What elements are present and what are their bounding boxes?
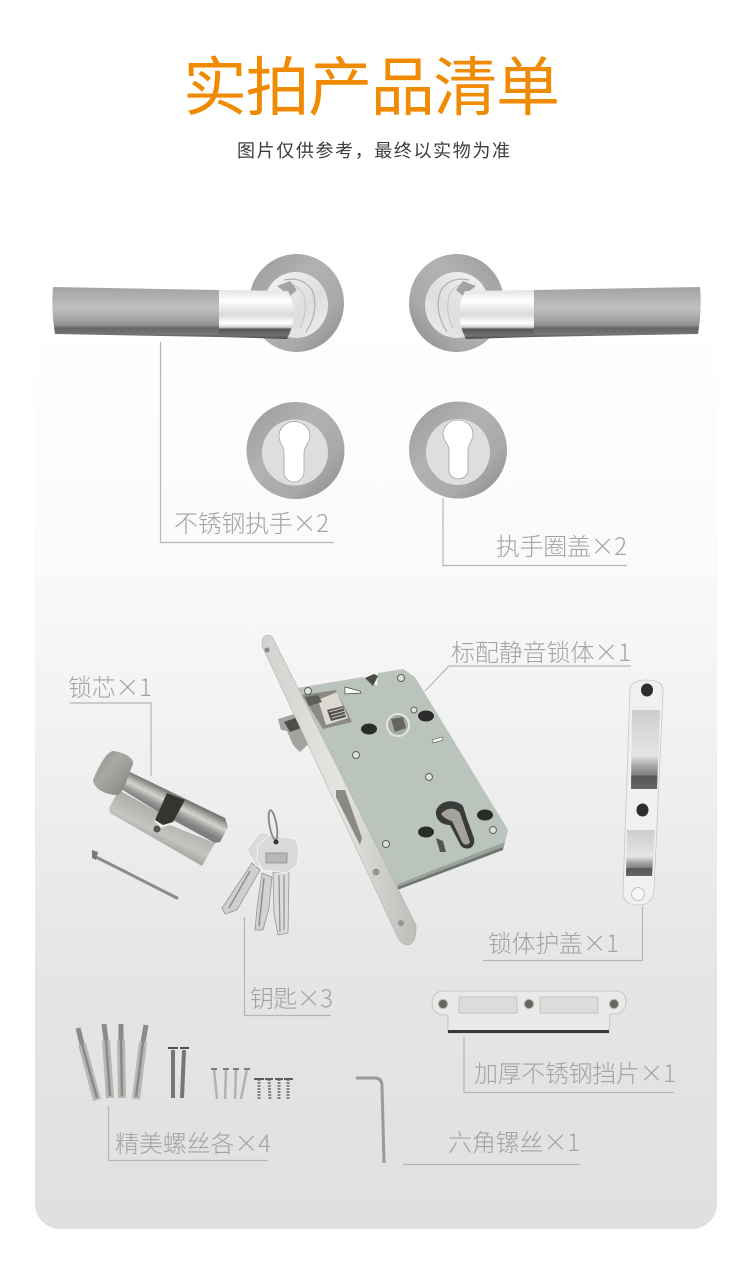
callout: handle cover: 执手圈盖×2 <box>496 527 627 562</box>
callout: silent lock body: 标配静音锁体×1 <box>451 633 631 668</box>
callout: handle cover <box>443 498 627 566</box>
icon: lock cylinder with pin <box>92 751 228 898</box>
callout: strike plate <box>464 1037 676 1092</box>
callout: silent lock body <box>425 633 631 691</box>
icon: keys <box>222 810 299 935</box>
icon: hex key <box>356 1078 384 1163</box>
callout: screws <box>108 1106 271 1160</box>
callout: cover plate <box>483 906 642 960</box>
icon: right door handle <box>409 254 701 352</box>
callout: stainless handle <box>160 342 334 542</box>
callout: strike plate: 加厚不锈钢挡片×1 <box>474 1054 676 1089</box>
callout: cylinder: 锁芯×1 <box>68 668 152 703</box>
callout: screws: 精美螺丝各×4 <box>115 1124 271 1159</box>
icon: right handle cover ring <box>409 402 507 498</box>
title: 实拍产品清单 <box>183 37 560 129</box>
callout: keys: 钥匙×3 <box>250 979 333 1014</box>
panel: product backdrop <box>35 340 717 1229</box>
callout: hex screw: 六角镙丝×1 <box>448 1123 580 1158</box>
icon: lock body cover plate <box>623 680 663 905</box>
icon: left door handle <box>52 254 344 352</box>
callout: stainless handle: 不锈钢执手×2 <box>174 504 329 539</box>
callout: cover plate: 锁体护盖×1 <box>488 924 619 959</box>
callout: cylinder <box>68 668 152 776</box>
icon: strike plate <box>432 991 626 1033</box>
callout: keys <box>244 917 333 1016</box>
icon: mortise lock body <box>262 635 508 945</box>
icon: screws <box>78 1024 293 1100</box>
subtitle: 图片仅供参考，最终以实物为准 <box>237 137 510 163</box>
icon: left handle cover ring <box>246 402 344 499</box>
